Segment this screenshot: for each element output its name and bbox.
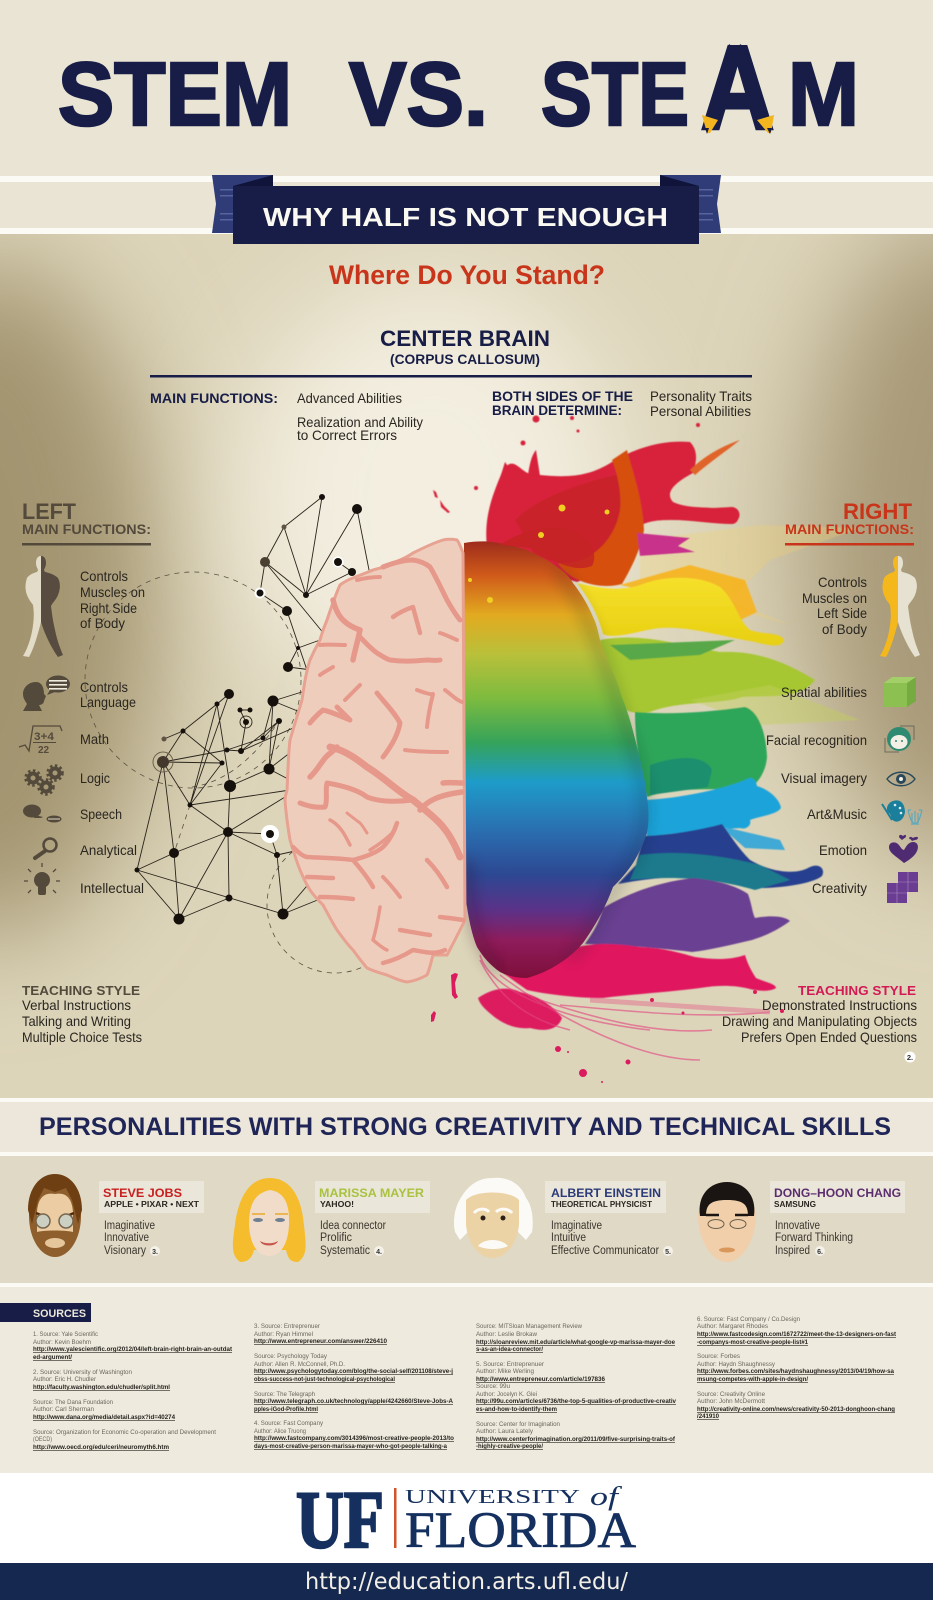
sources column 4: [697, 1317, 896, 1420]
teaching style right: Demonstrated Instructions: [762, 997, 917, 1013]
sources column 1: 2. Source: University of Washington: [33, 1370, 132, 1376]
left labels: Controls: [80, 568, 128, 584]
sources column 2: Source: The Telegraph: [254, 1392, 315, 1398]
sources column 2: Author: Ryan Himmel: [254, 1332, 313, 1338]
sources column 4: /241910: [697, 1413, 720, 1420]
sources column 1: Source: The Dana Foundation: [33, 1400, 113, 1406]
heading: center brain: CENTER BRAIN: [380, 326, 550, 351]
sources column 4: Author: John McDermott: [697, 1399, 765, 1405]
card: Dong-Hoon Chang: Forward Thinking: [775, 1232, 853, 1244]
white rule upper: [0, 176, 933, 182]
card: Steve Jobs: Visionary: [104, 1245, 146, 1257]
sources column 1: ed-argument/: [33, 1354, 72, 1361]
both sides of the brain determine: BOTH SIDES OF THE: [492, 389, 633, 404]
icon: light bulb: [24, 863, 60, 895]
left labels: of Body: [80, 615, 125, 631]
left labels: Right Side: [80, 600, 137, 616]
logo: University of Florida: [296, 1474, 636, 1565]
panel: url bar: http://education.arts.ufl.edu/: [305, 1569, 628, 1595]
teaching style right: Drawing and Manipulating Objects: [722, 1013, 917, 1029]
sources column 3: http://www.centerforimagination.org/2011/09/five-surprising-traits-of: [476, 1436, 676, 1443]
sources column 2: pples-iGod-Profile.html: [254, 1406, 318, 1413]
dark blue and teal splash: [618, 824, 823, 888]
right column heading: RIGHT: [843, 499, 913, 524]
both sides of the brain determine: Personality Traits: [650, 388, 752, 404]
left labels: Muscles on: [80, 584, 145, 600]
card: Steve Jobs: [99, 1181, 204, 1257]
dashed orbit circles: [85, 572, 403, 973]
left labels: Analytical: [80, 842, 137, 858]
teaching style right: Prefers Open Ended Questions: [741, 1029, 917, 1045]
both sides of the brain determine: BRAIN DETERMINE:: [492, 403, 622, 418]
icon: magnifier: [35, 838, 56, 858]
sources column 3: http://99u.com/articles/6736/the-top-5-qualities-of-productive-creativ: [476, 1398, 677, 1405]
sources column 3: Source: Center for Imagination: [476, 1422, 560, 1428]
footnote badge 2: [904, 1052, 916, 1062]
white rule above sources: [0, 1283, 933, 1287]
icon: eye: [887, 772, 915, 786]
panel: brain section background: [0, 220, 933, 1098]
teaching style right: TEACHING STYLE: [798, 983, 916, 998]
card: Steve Jobs: 3.: [152, 1249, 158, 1256]
card: Albert Einstein: 5.: [665, 1249, 671, 1256]
sources column 2: http://www.psychologytoday.com/blog/the-social-self/201108/steve-j: [254, 1368, 453, 1375]
sources column 1: Author: Kevin Boehm: [33, 1340, 91, 1346]
icon: puzzle: [887, 872, 918, 903]
sources column 2: http://www.entrepreneur.com/answer/226410: [254, 1338, 388, 1345]
sources column 4: msung-competes-with-apple-in-design/: [697, 1376, 808, 1383]
sources column 1: Author: Carl Sherman: [33, 1407, 94, 1413]
sources column 1: (OECD): [33, 1437, 52, 1443]
sources column 1: 1. Source: Yale Scientific: [33, 1332, 98, 1338]
center brain main functions: to Correct Errors: [297, 427, 397, 443]
icon: cube: [884, 677, 916, 707]
sources column 2: Author: Allen R. McConnell, Ph.D.: [254, 1362, 345, 1368]
card: Marissa Mayer: YAHOO!: [320, 1200, 354, 1209]
card: Albert Einstein: Intuitive: [551, 1232, 586, 1244]
sources column 4: http://www.forbes.com/sites/haydnshaughnessy/2013/04/19/how-sa: [697, 1368, 895, 1375]
sources column 4: Source: Creativity Online: [697, 1392, 766, 1398]
left column heading: MAIN FUNCTIONS:: [22, 521, 151, 537]
card: Albert Einstein: ALBERT EINSTEIN: [551, 1186, 661, 1200]
paint splashes right of the brain: [433, 416, 860, 1030]
left labels: Language: [80, 694, 136, 710]
sources column 2: 3. Source: Entreprenuer: [254, 1324, 320, 1330]
sources column 2: obss-success-not-just-technological-psychological: [254, 1376, 395, 1383]
logo: University of Florida: FLORIDA: [405, 1503, 636, 1559]
card: Marissa Mayer: Systematic: [320, 1245, 370, 1257]
left labels: Controls: [80, 679, 128, 695]
yellow paint drops: [468, 504, 610, 603]
icon: speech lips: [23, 804, 62, 822]
orange streak above the red splash: [690, 440, 740, 475]
brain folds: [293, 560, 463, 963]
left labels: [80, 568, 145, 896]
right column heading: [785, 499, 914, 546]
darker red lobe: [515, 472, 632, 564]
sources column 2: 4. Source: Fast Company: [254, 1421, 323, 1427]
portrait: Steve Jobs: [28, 1174, 82, 1257]
card: Dong-Hoon Chang: [770, 1181, 905, 1257]
both sides of the brain determine: Personal Abilities: [650, 403, 751, 419]
card: Steve Jobs: APPLE • PIXAR • NEXT: [104, 1200, 199, 1209]
left column heading: [22, 499, 151, 546]
right labels: Art&Music: [807, 806, 867, 822]
sources column 3: [476, 1324, 677, 1450]
sources column 1: http://www.yalescientific.org/2012/04/left-brain-right-brain-an-outdat: [33, 1346, 232, 1353]
green splash: [635, 707, 767, 797]
sources column 3: 5. Source: Entreprenuer: [476, 1362, 544, 1368]
sources column 3: -highly-creative-people/: [476, 1443, 543, 1450]
title: M: [788, 45, 859, 145]
title: VS.: [349, 45, 488, 145]
card: Dong-Hoon Chang: DONG–HOON CHANG: [774, 1186, 901, 1200]
sources column 3: es-and-how-to-identify-them: [476, 1406, 557, 1413]
right labels: Left Side: [817, 605, 867, 621]
card: Marissa Mayer: [315, 1181, 430, 1257]
cyan splash: [646, 778, 781, 837]
magenta streak: [637, 533, 695, 556]
left labels: Math: [80, 731, 109, 747]
sources column 3: Author: Mike Werling: [476, 1369, 534, 1375]
sources column 4: http://creativity-online.com/news/creativity-50-2013-donghoon-chang: [697, 1406, 895, 1413]
left column heading: LEFT: [22, 499, 77, 524]
portrait: Dong-Hoon Chang: [698, 1182, 756, 1262]
card: Albert Einstein: THEORETICAL PHYSICIST: [551, 1200, 652, 1209]
sources column 3: s-as-an-idea-connector/: [476, 1346, 543, 1353]
title: STE: [541, 45, 689, 145]
card: Steve Jobs: Imaginative: [104, 1220, 155, 1232]
center brain main functions: Realization and Ability: [297, 414, 423, 430]
right labels: [766, 574, 867, 896]
card: Albert Einstein: [545, 1181, 673, 1257]
left labels: Intellectual: [80, 880, 144, 896]
icon: palette and lyre: [882, 800, 922, 824]
logo: University of Florida: UNIVERSITY: [405, 1486, 580, 1508]
sources label: [0, 1303, 91, 1322]
icon: face: [885, 726, 914, 752]
logo: University of Florida: UF: [296, 1474, 384, 1565]
card: Marissa Mayer: Idea connector: [320, 1220, 386, 1232]
sources column 1: [33, 1332, 232, 1451]
crimson splash: [503, 944, 776, 998]
sources column 1: http://faculty.washington.edu/chudler/split.html: [33, 1384, 170, 1391]
sources column 4: http://www.fastcodesign.com/1672722/meet-the-13-designers-on-fast: [697, 1331, 896, 1338]
icon: math root: [19, 726, 62, 756]
sources column 2: days-most-creative-person-marissa-mayer-who-got-people-talking-a: [254, 1443, 448, 1450]
sources column 3: http://www.entrepreneur.com/article/197836: [476, 1376, 606, 1383]
right column heading: MAIN FUNCTIONS:: [785, 521, 914, 537]
teaching style left: [22, 983, 142, 1045]
both sides of the brain determine: [492, 388, 752, 419]
sources column 1: http://www.dana.org/media/detail.aspx?id=40274: [33, 1414, 176, 1421]
white rule lower: [0, 228, 933, 234]
card: Steve Jobs: Innovative: [104, 1232, 149, 1244]
card: Dong-Hoon Chang: Inspired: [775, 1245, 810, 1257]
sources column 4: Author: Margaret Rhodes: [697, 1324, 768, 1330]
paint droplets: [431, 973, 784, 1083]
network nodes: [134, 494, 362, 924]
title: A: [701, 22, 774, 154]
teaching style left: Talking and Writing: [22, 1013, 131, 1029]
card: Dong-Hoon Chang: Innovative: [775, 1220, 820, 1232]
left brain hemisphere: [285, 539, 465, 982]
panel: url bar: [0, 1563, 933, 1600]
sources column 4: 6. Source: Fast Company / Co.Design: [697, 1317, 800, 1323]
heading: center brain: (CORPUS CALLOSUM): [390, 352, 540, 367]
faded yellow streaks: [640, 525, 860, 625]
teaching style left: Multiple Choice Tests: [22, 1029, 142, 1045]
subtitle: Where Do You Stand: Where Do You Stand?: [329, 260, 605, 290]
footnote badge 2: 2.: [907, 1053, 913, 1062]
card: Albert Einstein: Imaginative: [551, 1220, 602, 1232]
card: Marissa Mayer: Prolific: [320, 1232, 352, 1244]
card: Albert Einstein: Effective Communicator: [551, 1245, 659, 1257]
panel: personalities row background: [0, 1156, 933, 1283]
icon: hearts: [889, 835, 918, 863]
sources column 1: http://www.oecd.org/edu/ceri/neuromyth6.htm: [33, 1444, 170, 1451]
orange fade: [620, 565, 757, 625]
panel: personalities heading band: [0, 1098, 933, 1156]
sources column 3: http://sloanreview.mit.edu/article/what-google-vp-marissa-mayer-doe: [476, 1339, 676, 1346]
sources column 3: Source: 99u: [476, 1384, 510, 1390]
orange splash: [558, 450, 644, 586]
icon: math root: 22: [38, 745, 50, 756]
sources column 3: Author: Laura Lately: [476, 1429, 533, 1435]
red splash: [433, 416, 740, 582]
right labels: Muscles on: [802, 590, 867, 606]
center brain main functions: Advanced Abilities: [297, 390, 402, 406]
sources column 1: Author: Eric H. Chudler: [33, 1377, 96, 1383]
card: Dong-Hoon Chang: SAMSUNG: [774, 1200, 816, 1209]
teaching style right: [722, 983, 917, 1045]
icon: left body figure: [23, 556, 63, 657]
right labels: Spatial abilities: [781, 684, 867, 700]
right labels: Controls: [818, 574, 867, 590]
icon: math root: 3+4: [34, 731, 55, 743]
right labels: Emotion: [819, 842, 867, 858]
title: [58, 22, 859, 154]
banner text: WHY HALF IS NOT ENOUGH: [263, 202, 668, 232]
sources label: SOURCES: [33, 1308, 86, 1320]
card: Marissa Mayer: 4.: [376, 1249, 382, 1256]
sources column 4: -companys-most-creative-people-list#1: [697, 1339, 809, 1346]
right brain hemisphere in rainbow paint: [464, 541, 648, 978]
left labels: Speech: [80, 806, 122, 822]
icon: pencil tips on the letter A: [702, 44, 774, 134]
purple splash: [585, 878, 790, 952]
sources column 2: http://www.telegraph.co.uk/technology/apple/4242660/Steve-Jobs-A: [254, 1398, 454, 1405]
sources column 3: Source: MITSloan Management Review: [476, 1324, 583, 1330]
right labels: Facial recognition: [766, 732, 867, 748]
logo: University of Florida: of: [590, 1482, 623, 1511]
portrait: Albert Einstein: [454, 1178, 533, 1258]
icon: speaking head: [23, 676, 70, 711]
sources column 1: Source: Organization for Economic Co-operation and Development: [33, 1430, 216, 1436]
card: Steve Jobs: STEVE JOBS: [103, 1186, 182, 1200]
pink paint rays: [480, 955, 770, 1060]
sources column 4: Author: Haydn Shaughnessy: [697, 1362, 775, 1368]
panel: sources background: [0, 1287, 933, 1473]
title: STEM: [58, 45, 292, 145]
sources column 4: Source: Forbes: [697, 1354, 740, 1360]
panel: logo band: [0, 1473, 933, 1563]
sources column 3: Author: Leslie Brokaw: [476, 1332, 538, 1338]
lime splash: [600, 637, 815, 713]
heading: center brain: [150, 326, 752, 378]
crimson splat: [478, 989, 562, 1030]
header background: [0, 0, 933, 234]
card: Dong-Hoon Chang: 6.: [817, 1249, 823, 1256]
right labels: Creativity: [812, 880, 867, 896]
red splash over hemisphere top: [500, 528, 594, 568]
network diagram: [137, 497, 370, 919]
sources column 2: [254, 1324, 454, 1450]
sources column 3: Author: Jocelyn K. Glei: [476, 1392, 537, 1398]
card: Marissa Mayer: MARISSA MAYER: [319, 1186, 424, 1200]
teaching style left: Verbal Instructions: [22, 997, 131, 1013]
left labels: Logic: [80, 770, 110, 786]
center brain main functions: MAIN FUNCTIONS:: [150, 391, 278, 406]
icon: gears: [26, 766, 62, 794]
icon: right body figure: [880, 556, 920, 657]
sources column 2: Author: Alice Truong: [254, 1429, 306, 1435]
ribbon banner: [212, 175, 721, 244]
teaching style left: TEACHING STYLE: [22, 983, 140, 998]
yellow splash: [577, 578, 784, 646]
right labels: Visual imagery: [781, 770, 867, 786]
sources column 2: http://www.fastcompany.com/3014396/most-creative-people-2013/to: [254, 1435, 454, 1442]
sources column 2: Source: Psychology Today: [254, 1354, 327, 1360]
personalities heading: PERSONALITIES WITH STRONG CREATIVITY AND TECHNICAL SKILLS: [39, 1113, 891, 1141]
portrait: Marissa Mayer: [233, 1178, 306, 1262]
center brain main functions: [150, 390, 423, 443]
right labels: of Body: [822, 621, 867, 637]
